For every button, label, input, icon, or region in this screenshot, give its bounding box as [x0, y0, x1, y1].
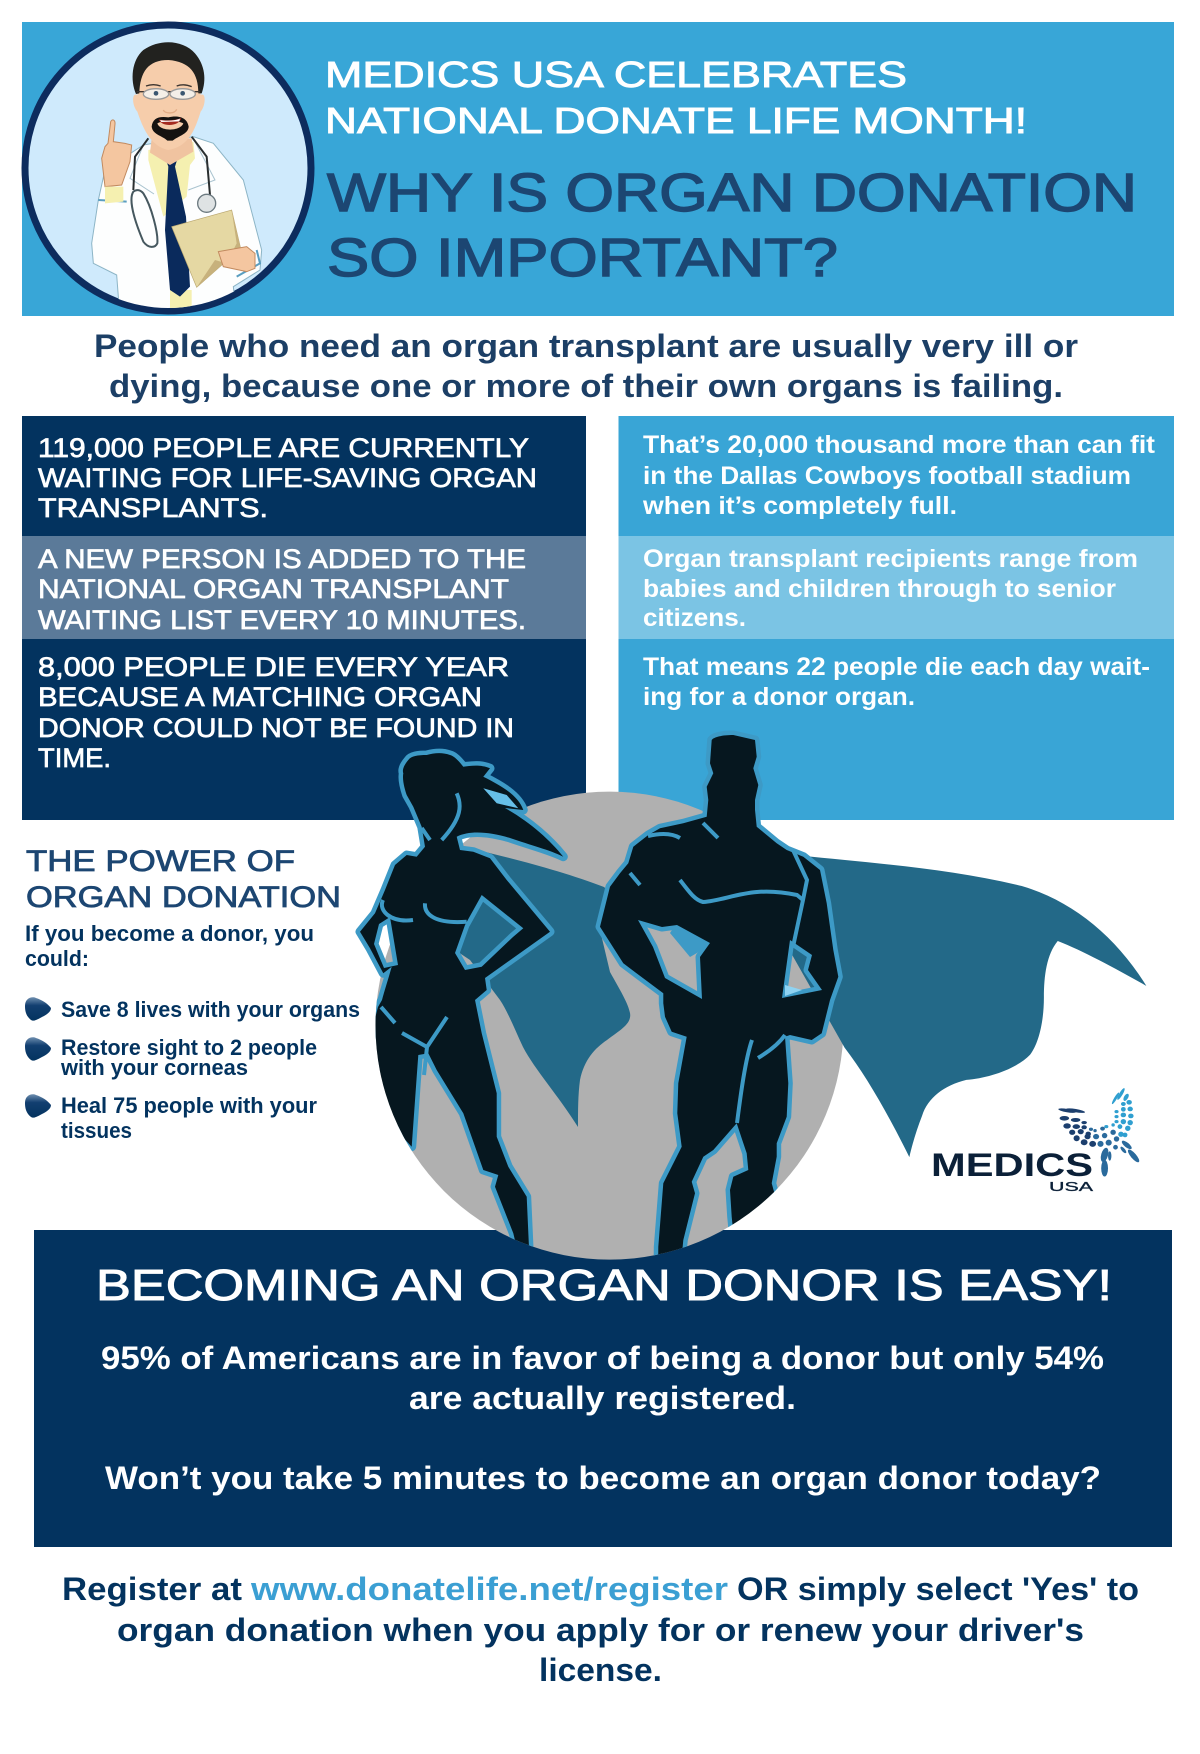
- header subtitle: [325, 54, 1027, 141]
- goatee: [152, 116, 189, 141]
- woman contour lines: [381, 793, 467, 1075]
- heading: easy: BECOMING AN ORGAN DONOR IS EASY!: [96, 1261, 1112, 1310]
- statistic: favor vs registered: are actually registered.: [409, 1380, 796, 1416]
- header subtitle: MEDICS USA CELEBRATES: [325, 54, 907, 95]
- fact: daily deaths: [643, 653, 1150, 711]
- intro statement: [94, 328, 1078, 404]
- panel: right statistics: [618, 416, 1174, 820]
- main title: SO IMPORTANT?: [327, 228, 838, 288]
- fact: stadium comparison: in the Dallas Cowboys football stadium: [643, 462, 1131, 490]
- lead-in text: If you become a donor, you: [25, 921, 314, 946]
- stat: deaths per year: BECAUSE A MATCHING ORGAN: [38, 682, 482, 712]
- registration call to action: [62, 1571, 1139, 1688]
- hair: [133, 42, 204, 94]
- main title: [327, 163, 1137, 288]
- list item: tissues: [61, 1093, 317, 1143]
- fact: recipient ages: citizens.: [643, 604, 746, 632]
- list item: tissues: Heal 75 people with your: [61, 1093, 317, 1118]
- list item: sight: Restore sight to 2 people: [61, 1035, 317, 1060]
- statistic: favor vs registered: 95% of Americans are in favor of being a donor but only 54%: [101, 1340, 1104, 1376]
- logo: Medics USA: USA: [1049, 1179, 1094, 1194]
- mouth: [159, 118, 181, 125]
- logo: Medics USA: MEDICS: [931, 1147, 1093, 1183]
- question: Won’t you take 5 minutes to become an organ donor today?: [105, 1460, 1101, 1496]
- heading: [26, 845, 341, 914]
- fact: stadium comparison: when it’s completely full.: [642, 492, 957, 520]
- cuff: [105, 187, 123, 203]
- heading: ORGAN DONATION: [26, 881, 341, 914]
- stat: deaths per year: [38, 652, 514, 773]
- ponytail highlight: [483, 788, 518, 808]
- logo: Medics USA: [931, 1087, 1141, 1194]
- list item: tissues: tissues: [61, 1118, 132, 1143]
- panel: bottom call to action: [34, 1230, 1172, 1547]
- statistic: favor vs registered: [101, 1340, 1104, 1416]
- superhero silhouette: [600, 735, 838, 1275]
- registration call to action: OR simply select 'Yes' to: [737, 1571, 1139, 1607]
- heading: THE POWER OF: [26, 845, 295, 878]
- icon: heart: [25, 1094, 51, 1118]
- fact: stadium comparison: That’s 20,000 thousand more than can fit: [643, 431, 1156, 459]
- lead-in text: could:: [25, 946, 89, 971]
- fact: recipient ages: [643, 545, 1138, 632]
- tie: [164, 153, 190, 297]
- doctor portrait: [25, 25, 311, 317]
- collar lapels: [130, 142, 215, 194]
- stat: deaths per year: 8,000 PEOPLE DIE EVERY YEAR: [38, 652, 509, 682]
- stat: people waiting: TRANSPLANTS.: [38, 493, 268, 523]
- raised hand: [102, 120, 132, 187]
- header subtitle: NATIONAL DONATE LIFE MONTH!: [325, 100, 1027, 141]
- fact: daily deaths: ing for a donor organ.: [643, 683, 915, 711]
- fact: recipient ages: babies and children through to senior: [643, 575, 1116, 603]
- panel: left statistics: [22, 416, 586, 820]
- folder: [172, 210, 241, 287]
- stat: people waiting: 119,000 PEOPLE ARE CURRENTLY: [38, 433, 529, 463]
- link: www.donatelife.net/register: [250, 1571, 728, 1607]
- icon: heart: [25, 997, 51, 1021]
- stat: people waiting: WAITING FOR LIFE-SAVING ORGAN: [38, 463, 537, 493]
- header banner: [22, 22, 1174, 316]
- man side gap highlight: [670, 930, 704, 957]
- icon: heart: [25, 1037, 51, 1061]
- coat: [92, 137, 262, 317]
- cape: left: [440, 845, 640, 1127]
- stat: added every 10 minutes: A NEW PERSON IS ADDED TO THE: [38, 544, 526, 574]
- neck: [150, 138, 193, 165]
- stat: added every 10 minutes: [38, 544, 526, 635]
- cape: right: [784, 856, 1146, 1157]
- main title: WHY IS ORGAN DONATION: [327, 163, 1137, 223]
- face: [133, 56, 205, 150]
- registration call to action: Register at: [62, 1571, 242, 1607]
- list item: sight: with your corneas: [60, 1055, 248, 1080]
- man contour lines: [630, 823, 807, 1123]
- stat: deaths per year: DONOR COULD NOT BE FOUND IN: [38, 713, 514, 743]
- fact: daily deaths: That means 22 people die each day wait-: [643, 653, 1150, 681]
- stat: deaths per year: TIME.: [38, 743, 111, 773]
- list item: lives: Save 8 lives with your organs: [61, 997, 360, 1022]
- lead-in text: [25, 921, 314, 971]
- registration call to action: organ donation when you apply for or renew your driver's: [117, 1612, 1084, 1648]
- nose: [163, 109, 177, 113]
- stat: added every 10 minutes: NATIONAL ORGAN TRANSPLANT: [38, 574, 509, 604]
- superheroine silhouette: [360, 753, 563, 1270]
- registration call to action: license.: [539, 1652, 662, 1688]
- stat: added every 10 minutes: WAITING LIST EVERY 10 MINUTES.: [38, 605, 526, 635]
- glasses and eyes: [137, 85, 200, 92]
- list item: sight: [60, 1035, 317, 1080]
- stat: people waiting: [38, 433, 537, 523]
- section: power of organ donation: [25, 845, 360, 1143]
- intro statement: People who need an organ transplant are usually very ill or: [94, 328, 1078, 364]
- gray moon circle: [376, 792, 844, 1260]
- holding hand: [218, 247, 255, 272]
- illustration: superheroes: [360, 735, 1146, 1275]
- sleeve cuff edges: [98, 200, 260, 277]
- fact: stadium comparison: [642, 431, 1156, 520]
- stethoscope: [133, 137, 210, 195]
- intro statement: dying, because one or more of their own organs is failing.: [109, 368, 1063, 404]
- shirt: [148, 142, 195, 313]
- wrist highlight: [785, 985, 802, 996]
- fact: recipient ages: Organ transplant recipients range from: [643, 545, 1138, 573]
